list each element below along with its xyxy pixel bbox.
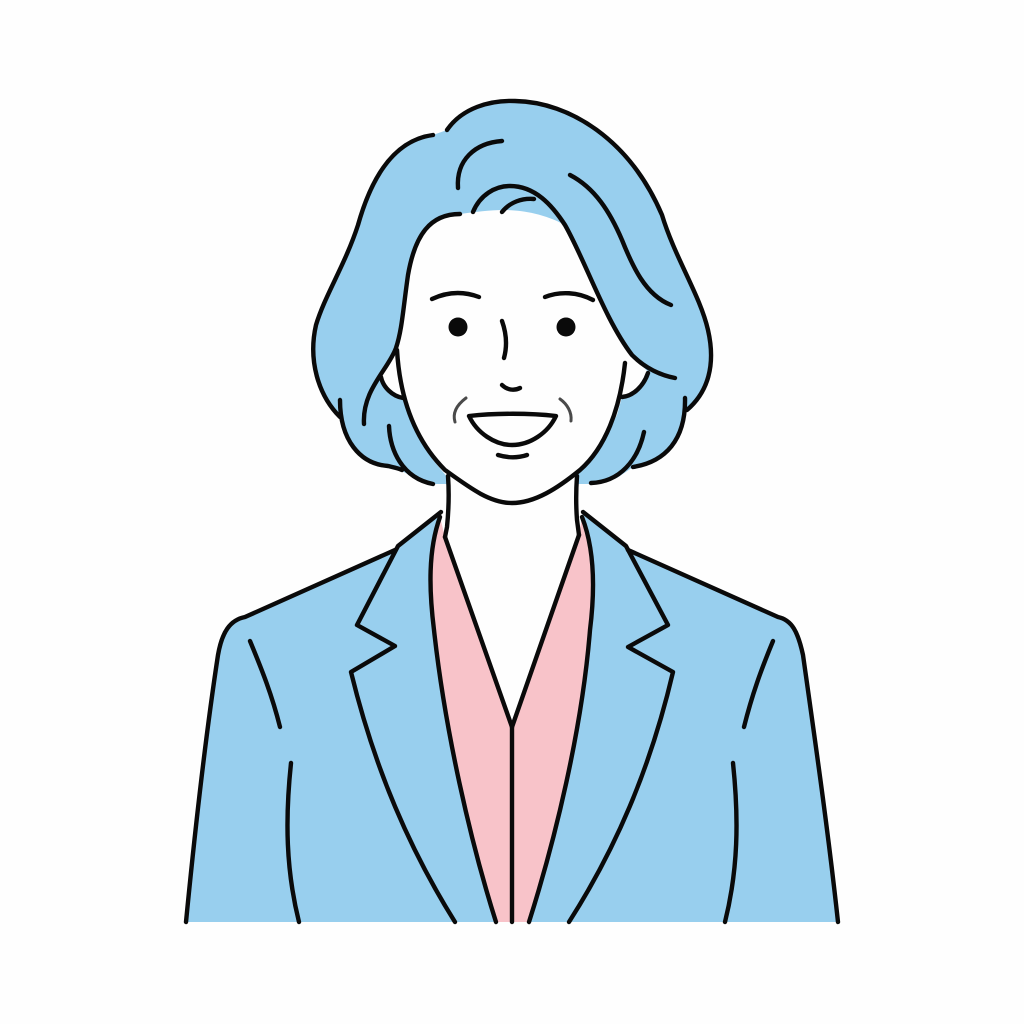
hair outline [313,101,711,484]
blouse fill [430,517,593,922]
hair fill [313,101,711,484]
neck [445,476,579,537]
face and neck fill [381,210,649,727]
eyes [448,318,576,336]
blouse lines [430,517,593,922]
line work [186,101,838,922]
blazer outline [186,512,838,922]
blazer fill [186,512,838,922]
face outline [381,350,648,503]
eyebrows and nose [432,293,593,390]
smile wrinkles [454,398,571,422]
smile [469,414,556,457]
